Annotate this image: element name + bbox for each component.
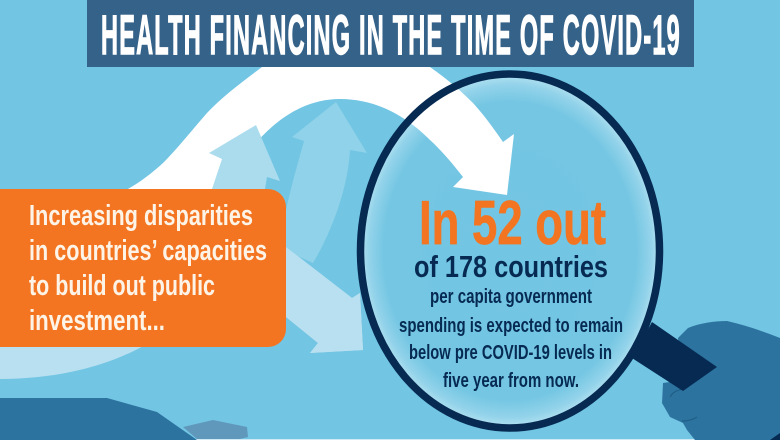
white curved arrow	[120, 67, 514, 195]
lens description: below pre COVID-19 levels in	[409, 341, 612, 364]
callout text: to build out public	[29, 270, 215, 302]
short light blue up arrow	[209, 125, 280, 189]
lens statistic text: In 52 out	[419, 189, 606, 258]
callout text: Increasing disparities	[29, 200, 253, 232]
lens description: spending is expected to remain	[399, 314, 623, 337]
handle end below hand	[770, 433, 780, 440]
icon: lower left hand	[0, 398, 197, 440]
callout text: investment...	[29, 305, 165, 337]
lens glass	[360, 74, 660, 428]
lens description	[399, 249, 623, 392]
title banner	[87, 0, 694, 67]
lens description: of 178 countries	[414, 249, 608, 284]
title text: HEALTH FINANCING IN THE TIME OF COVID-19	[101, 4, 680, 67]
pale curved arrow pointing into the lens	[0, 247, 363, 379]
icon: hand holding magnifier	[662, 321, 780, 440]
callout text: in countries’ capacities	[29, 235, 267, 267]
lens statistic text	[399, 189, 623, 392]
icon: lower left finger	[183, 420, 248, 439]
tall light blue up arrow	[284, 102, 367, 263]
finger grooves	[670, 388, 697, 421]
callout text	[29, 200, 267, 337]
lens description: five year from now.	[443, 369, 579, 392]
lens ring	[360, 74, 660, 428]
orange callout panel	[0, 189, 286, 347]
magnifier handle	[632, 322, 717, 391]
lens description: per capita government	[430, 285, 592, 308]
pale arrow overlap on tall arrow	[286, 247, 363, 353]
